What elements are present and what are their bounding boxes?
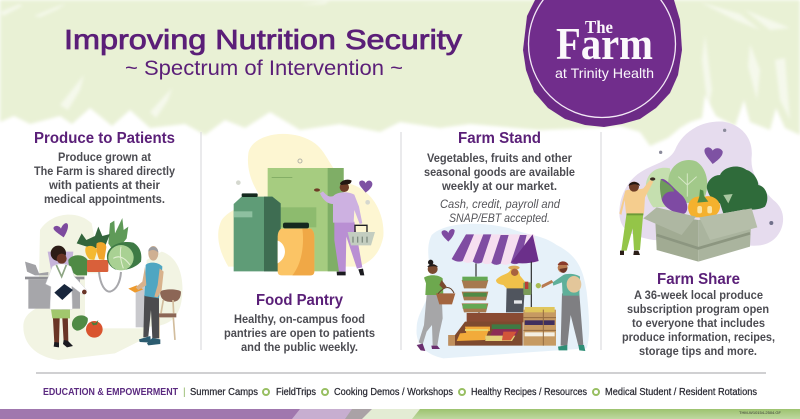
chair <box>160 289 181 302</box>
text: Produce to Patients description: Produce grown at <box>58 152 151 164</box>
footer: education and empowerment: Cooking Demos / Workshops <box>334 387 453 398</box>
pepper <box>688 196 720 217</box>
subtitle: ~ Spectrum of Intervention ~ <box>125 57 403 80</box>
bag handle <box>99 272 121 292</box>
illustration: market stall with shoppers <box>417 224 589 358</box>
box <box>655 213 698 262</box>
text: Farm Stand description: seasonal goods are available <box>424 167 575 179</box>
footer: education and empowerment <box>43 387 757 398</box>
heading: Produce to Patients: Produce to Patients <box>34 130 175 147</box>
text: Farm Share description: to everyone that includes <box>632 318 765 330</box>
illustration: produce box with person <box>619 122 783 262</box>
illustration: doctor and patient with produce <box>23 215 182 360</box>
vegetables <box>68 255 88 275</box>
text: Farm Stand description: Vegetables, fruits and other <box>427 153 572 165</box>
carrots in hand <box>128 285 143 293</box>
crate stack <box>523 310 556 346</box>
footer: education and empowerment: EDUCATION & EMPOWERMENT <box>43 387 178 398</box>
computer desk <box>25 262 48 275</box>
logo: The Farm at Trinity Health: The <box>585 17 613 37</box>
logo: The Farm at Trinity Health: at Trinity Health <box>555 65 654 81</box>
text: Food Pantry description: and the public weekly. <box>241 342 358 354</box>
milk carton <box>234 197 281 271</box>
footer: education and empowerment: Healthy Recipes / Resources <box>471 387 587 398</box>
horizontal rule <box>36 372 766 374</box>
heading: Food Pantry: Food Pantry <box>256 292 343 309</box>
text: Farm Stand description <box>424 153 575 225</box>
footer: education and empowerment: Summer Camps <box>190 387 258 398</box>
panel: Farm Stand <box>417 130 589 358</box>
text: Farm Stand description: SNAP/EBT accepted. <box>449 213 550 225</box>
vendor <box>506 285 525 312</box>
text: Produce to Patients description: medical appointments. <box>44 194 165 206</box>
heart <box>704 147 723 164</box>
text: Farm Share description: produce information, recipes, <box>622 332 775 344</box>
panel: Farm Share <box>619 122 783 358</box>
panel: Produce to Patients <box>23 130 182 360</box>
title: Improving Nutrition Security <box>64 24 462 55</box>
cabbage leaves <box>646 168 673 207</box>
footer: education and empowerment: FieldTrips <box>276 387 316 398</box>
title <box>64 24 462 80</box>
person <box>621 213 643 251</box>
illustration: pantry goods and shopper <box>218 134 383 275</box>
heart <box>442 229 455 242</box>
shopper <box>334 222 362 272</box>
text: Farm Share description: storage tips and more. <box>639 346 757 358</box>
male customer <box>561 293 583 346</box>
footer: education and empowerment: | <box>183 387 186 398</box>
heart <box>53 223 68 237</box>
text: Farm Share description: A 36-week local produce <box>634 290 763 302</box>
column dividers <box>201 132 601 350</box>
heading: Farm Share: Farm Share <box>657 271 740 288</box>
heading: Farm Stand: Farm Stand <box>458 130 541 147</box>
logo: The Farm at Trinity Health: Farm <box>556 18 653 69</box>
panel: Food Pantry <box>218 134 383 354</box>
basket <box>348 232 375 245</box>
awning <box>452 234 539 265</box>
bottom colour band <box>0 409 800 419</box>
heart <box>359 181 372 193</box>
tomato and greens <box>72 315 88 331</box>
footer: education and empowerment: Medical Student / Resident Rotations <box>605 387 757 398</box>
jar <box>278 229 314 275</box>
text: Produce to Patients description: with patients at their <box>48 180 161 192</box>
text: Food Pantry description: pantries are open to patients <box>224 328 375 340</box>
shopper with basket <box>419 294 443 346</box>
text: Farm Stand description: weekly at our market. <box>441 181 557 193</box>
doctor <box>52 307 68 343</box>
planter shelves <box>462 280 488 288</box>
text: Food Pantry description: Healthy, on-campus food <box>234 314 365 326</box>
eggplant <box>661 179 687 214</box>
broccoli <box>707 166 767 213</box>
stall counter <box>467 313 526 322</box>
text: Food Pantry description <box>224 314 375 354</box>
text: Farm Stand description: Cash, credit, payroll and <box>440 199 561 211</box>
footer code: THM-W10154-2504.GF <box>739 410 782 415</box>
text: Produce to Patients description <box>34 152 176 206</box>
text: Farm Share description <box>622 290 775 358</box>
text: Farm Share description: subscription program open <box>627 304 769 316</box>
text: Produce to Patients description: The Farm is shared directly <box>34 166 176 178</box>
patient <box>143 295 159 338</box>
logo: The Farm at Trinity Health <box>523 0 682 127</box>
